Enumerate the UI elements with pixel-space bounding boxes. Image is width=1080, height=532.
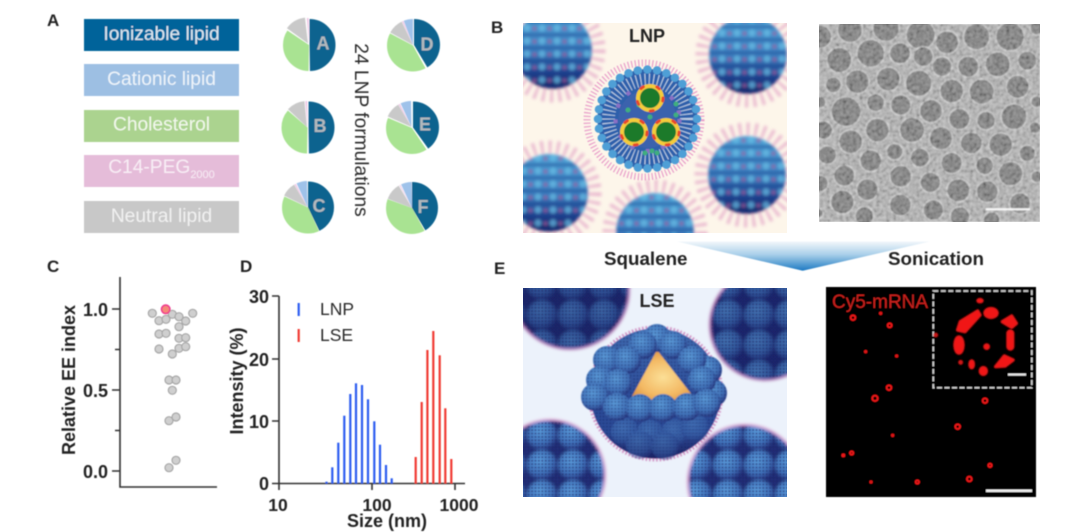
illustration background with blurred LNP particles bbox=[523, 23, 787, 233]
squalene core bbox=[630, 350, 696, 400]
pie F: F bbox=[418, 197, 428, 217]
lower shell lumps bbox=[611, 414, 709, 460]
core 1 bbox=[637, 85, 663, 111]
x tick labels: 100 bbox=[362, 495, 392, 515]
tick labels bbox=[83, 300, 108, 482]
illustration background with blurred LSE particles bbox=[523, 288, 787, 497]
panel: cryo-EM micrograph bbox=[819, 24, 1040, 222]
inset scale bar bbox=[1008, 374, 1026, 376]
highlighted point bbox=[162, 305, 170, 313]
y tick labels: 0 bbox=[259, 474, 269, 494]
pie E: E bbox=[419, 114, 431, 134]
panel: D size distribution bbox=[227, 257, 479, 531]
panel letter B: B bbox=[491, 18, 503, 37]
bars: LSE bbox=[415, 331, 452, 484]
panel letter D: D bbox=[240, 257, 252, 276]
panel: C relative EE index bbox=[47, 257, 217, 487]
label: Cy5-mRNA: Cy5-mRNA bbox=[832, 292, 928, 313]
label: Sonication: Sonication bbox=[888, 248, 984, 269]
particles bbox=[819, 24, 1040, 222]
arrow: process chevron bbox=[677, 242, 930, 271]
legend: neutral lipid: Neutral lipid bbox=[111, 206, 212, 227]
pie B bbox=[294, 114, 326, 140]
tick labels: 0.0 bbox=[83, 462, 108, 482]
legend: cholesterol: Cholesterol bbox=[113, 114, 210, 136]
legend: LNP bbox=[320, 299, 354, 319]
pie C: C bbox=[312, 196, 326, 216]
legend: C14-PEG2000: C14-PEG bbox=[108, 157, 190, 178]
y tick labels bbox=[249, 287, 269, 494]
panel letter C: C bbox=[47, 257, 59, 276]
heading: LNP: LNP bbox=[629, 26, 665, 46]
legend: ionizable lipid bbox=[84, 19, 239, 51]
panel letter A: A bbox=[47, 11, 59, 30]
bars: LNP bbox=[325, 383, 393, 484]
y axis label: Relative EE index bbox=[59, 305, 79, 455]
central LSE particle bbox=[581, 324, 727, 460]
legend: neutral lipid bbox=[84, 201, 239, 233]
pie A bbox=[295, 30, 330, 58]
legend: cationic lipid: Cationic lipid bbox=[107, 69, 216, 90]
y tick labels: 20 bbox=[249, 350, 269, 370]
legend: cationic lipid bbox=[84, 64, 239, 96]
data points bbox=[148, 305, 197, 472]
inset: magnified particle bbox=[935, 300, 1016, 374]
scale bar bbox=[986, 208, 1030, 210]
legend: C14-PEG2000 bbox=[84, 155, 239, 187]
pie D bbox=[400, 32, 434, 58]
panel: E LSE illustration bbox=[494, 262, 787, 497]
scale bar bbox=[986, 490, 1032, 492]
rotated label: 24 LNP formulations: 24 LNP formulations bbox=[350, 43, 371, 217]
legend: cholesterol bbox=[84, 110, 239, 142]
surface nanoparticles bbox=[581, 324, 727, 422]
y tick labels: 30 bbox=[249, 287, 269, 307]
legend: ionizable lipid: Ionizable lipid bbox=[103, 24, 220, 45]
x tick labels: 1000 bbox=[440, 495, 479, 515]
particle rings bbox=[842, 313, 992, 484]
x tick labels: 10 bbox=[268, 495, 288, 515]
panel: Cy5-mRNA fluorescence image bbox=[826, 287, 1036, 497]
core 2 bbox=[621, 119, 647, 145]
tick labels: 0.5 bbox=[83, 381, 108, 401]
y tick labels: 10 bbox=[249, 412, 269, 432]
legend bbox=[298, 299, 354, 345]
pie E bbox=[398, 114, 431, 141]
pie A: A bbox=[316, 34, 330, 54]
central LNP particle bbox=[587, 63, 701, 177]
x axis label: Size (nm) bbox=[347, 511, 427, 531]
pie F bbox=[399, 195, 428, 221]
pie B: B bbox=[314, 116, 326, 136]
x tick labels bbox=[268, 495, 479, 515]
inset frame bbox=[933, 291, 1032, 388]
pie D: D bbox=[420, 34, 434, 54]
legend: C14-PEG2000: 2000 bbox=[190, 169, 215, 181]
heading: LSE: LSE bbox=[639, 291, 675, 311]
legend: LSE bbox=[320, 325, 353, 345]
panel: A lipid legend and pies bbox=[47, 11, 434, 233]
core 3 bbox=[653, 119, 679, 145]
grain bbox=[819, 24, 1040, 222]
label: Squalene: Squalene bbox=[604, 248, 688, 269]
panel: B LNP illustration bbox=[491, 20, 787, 233]
panel letter E: E bbox=[494, 259, 505, 278]
axes bbox=[112, 277, 217, 487]
tick labels: 1.0 bbox=[83, 300, 108, 320]
y axis label: Intensity (%) bbox=[227, 327, 247, 435]
axes bbox=[272, 296, 465, 490]
pie C bbox=[294, 194, 326, 220]
